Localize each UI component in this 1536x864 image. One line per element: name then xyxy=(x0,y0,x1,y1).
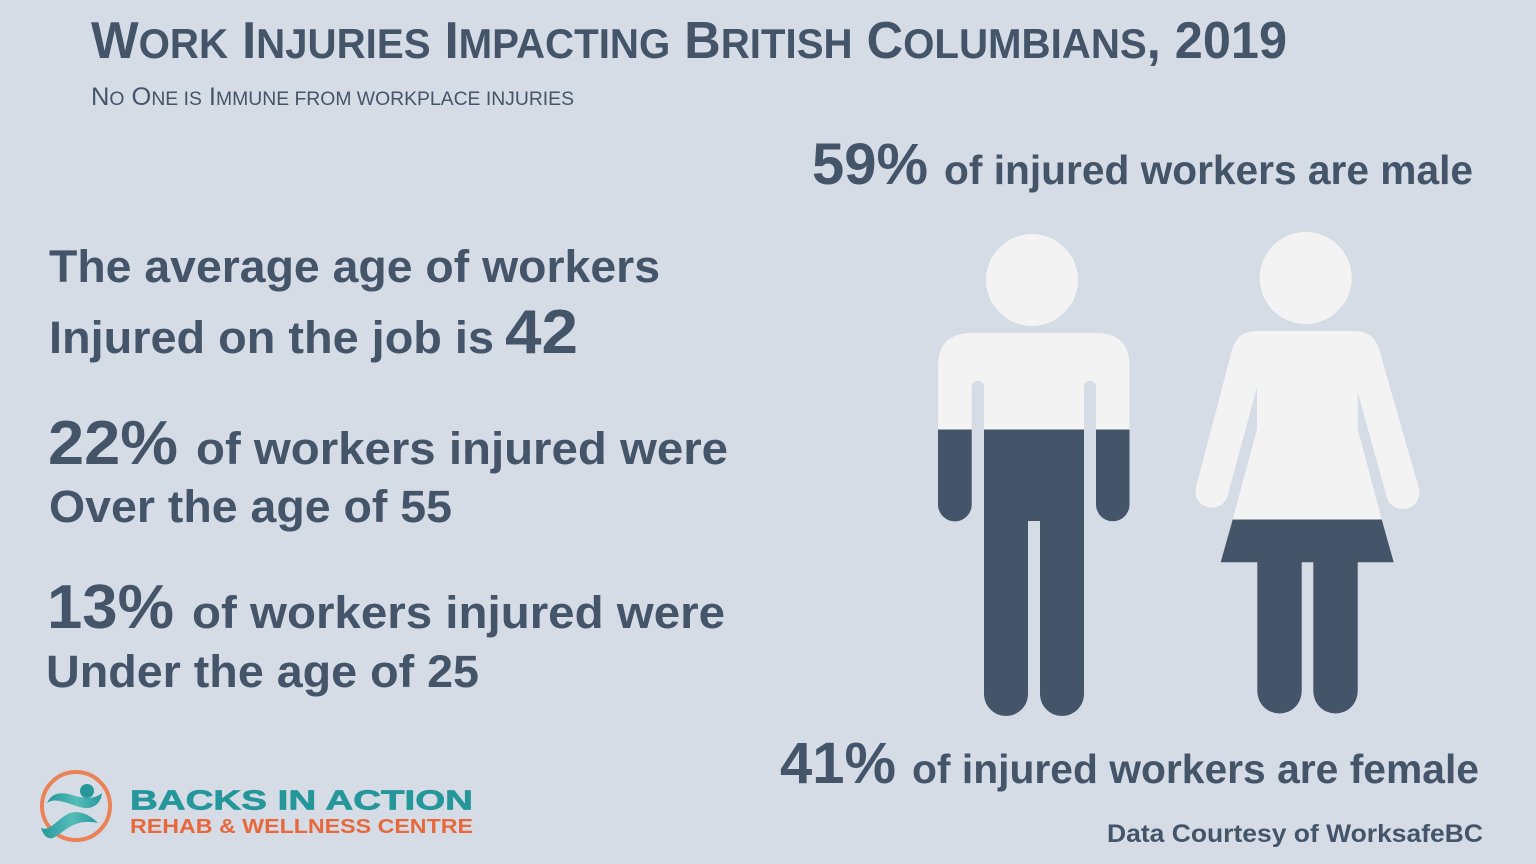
icon: female figure xyxy=(1195,232,1419,713)
icon: logo runner xyxy=(41,772,110,840)
title: WORK INJURIES IMPACTING BRITISH COLUMBIANS, 2019 xyxy=(91,12,1287,70)
text block: over 55: Over the age of 55 xyxy=(49,481,452,532)
text block: average age: 42 xyxy=(505,298,578,367)
text block: average age: The average age of workers xyxy=(49,241,660,292)
text block: under 25: 13% xyxy=(47,573,174,642)
subtitle: NO ONE IS IMMUNE FROM WORKPLACE INJURIES xyxy=(91,83,574,111)
logo: Backs in Action xyxy=(41,772,473,840)
text block: over 55 xyxy=(48,409,728,532)
female statistic xyxy=(780,731,1479,796)
male statistic: 59% xyxy=(812,132,928,197)
text block: under 25 xyxy=(46,573,725,697)
text block: average age: Injured on the job is xyxy=(49,312,494,363)
male statistic: of injured workers are male xyxy=(944,147,1473,193)
text block: over 55: 22% xyxy=(48,409,178,478)
female statistic: 41% xyxy=(780,731,896,796)
text block: over 55: of workers injured were xyxy=(196,423,728,474)
text block: under 25: Under the age of 25 xyxy=(46,646,479,697)
text block: under 25: of workers injured were xyxy=(192,587,725,638)
text block: average age xyxy=(49,241,660,367)
data source credit: Data Courtesy of WorksafeBC xyxy=(1107,820,1483,848)
logo wordmark: BACKS IN ACTION xyxy=(130,784,473,816)
icon: male figure xyxy=(938,234,1130,716)
female statistic: of injured workers are female xyxy=(912,746,1479,792)
male statistic xyxy=(812,132,1473,197)
logo tagline: REHAB & WELLNESS CENTRE xyxy=(130,816,473,838)
